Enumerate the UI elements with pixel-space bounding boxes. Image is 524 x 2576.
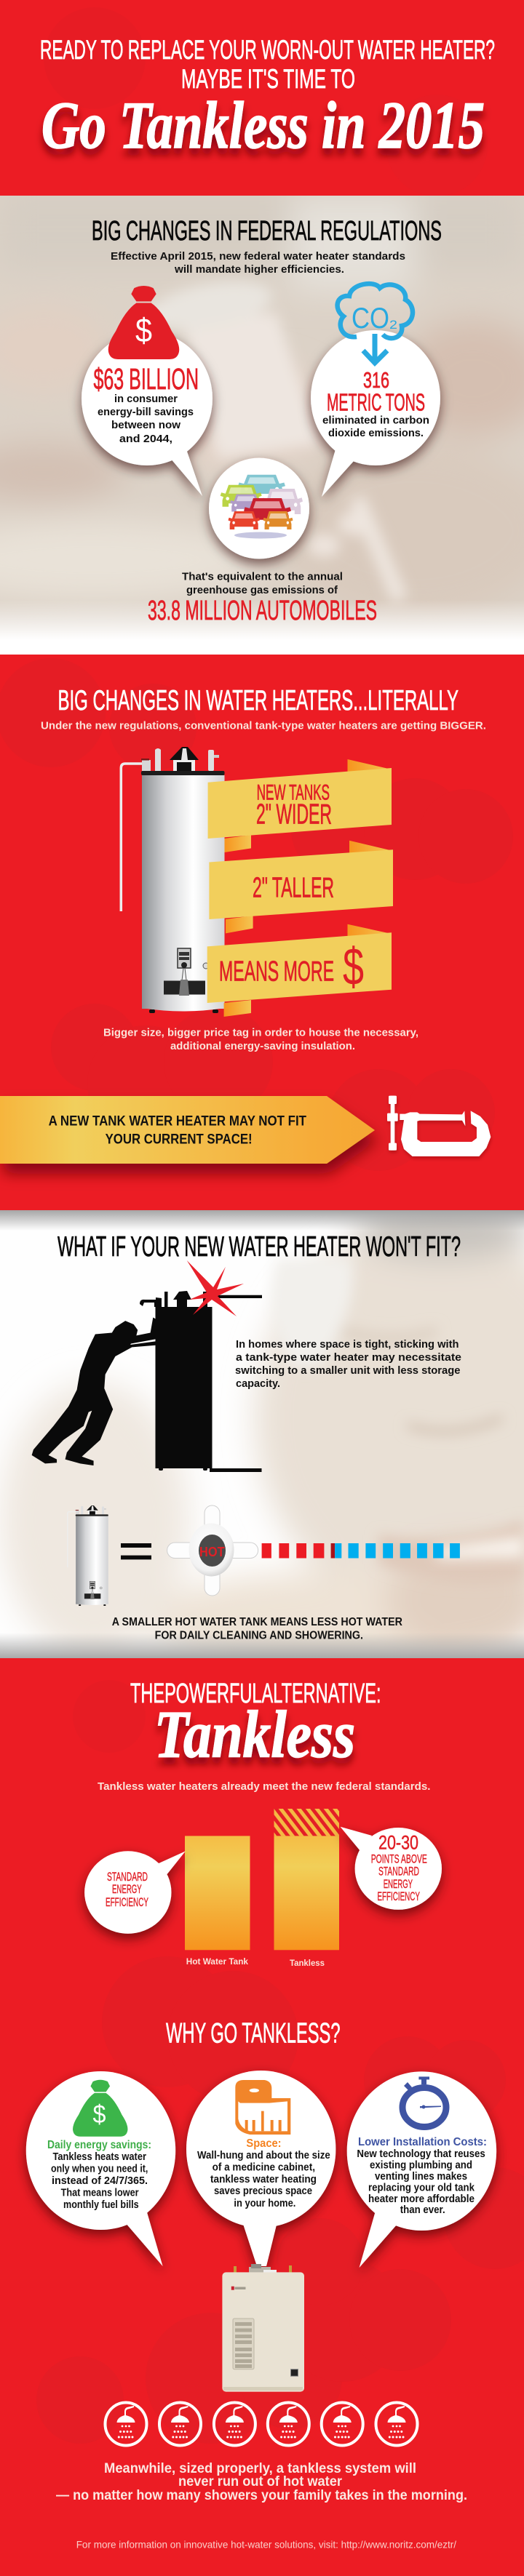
speech bubble bbox=[186, 2071, 336, 2266]
body bbox=[197, 2150, 330, 2209]
header line 2: MAYBE IT'S TIME TO bbox=[181, 64, 355, 94]
description: dioxide emissions. bbox=[328, 427, 424, 439]
ribbon: means more dollars bbox=[207, 924, 392, 1017]
callout: standard energy efficiency: EFFICIENCY bbox=[106, 1895, 148, 1909]
arrow banner: may not fit bbox=[0, 1096, 375, 1164]
intro text: Effective April 2015, new federal water heater standards bbox=[111, 250, 405, 263]
callout: standard energy efficiency: STANDARD bbox=[107, 1870, 148, 1884]
ribbon: means more dollars: MEANS MORE bbox=[219, 956, 334, 988]
callout: $63 billion savings bbox=[82, 286, 213, 496]
icon: CO2 cloud with arrow bbox=[338, 284, 413, 363]
body: monthly fuel bills bbox=[63, 2199, 139, 2211]
heading: the powerful alternative: THEPOWERFULALTERNATIVE: bbox=[130, 1679, 381, 1709]
arrow banner: may not fit: A NEW TANK WATER HEATER MAY NOT FIT bbox=[49, 1113, 306, 1129]
panel: federal regulations photo background bbox=[0, 189, 524, 655]
equivalence text: That's equivalent to the annual bbox=[182, 570, 343, 583]
text: smaller hot water tank bbox=[112, 1616, 402, 1642]
icon: stopwatch bbox=[402, 2076, 446, 2127]
equivalence text bbox=[148, 570, 377, 626]
icon: green money bag bbox=[73, 2080, 127, 2137]
text: meanwhile: Meanwhile, sized properly, a tankless system will bbox=[104, 2461, 416, 2476]
bubble bbox=[209, 458, 309, 559]
title: Lower Installation Costs: bbox=[358, 2136, 487, 2148]
icon: CO2 cloud with arrow: 2 bbox=[389, 318, 397, 332]
big red automobiles number: 33.8 MILLION AUTOMOBILES bbox=[148, 596, 377, 626]
man silhouette bbox=[32, 1317, 156, 1465]
body: tankless water heating bbox=[210, 2174, 317, 2185]
arrow banner: may not fit: YOUR CURRENT SPACE! bbox=[106, 1131, 253, 1147]
text: homes where space is tight: capacity. bbox=[236, 1377, 280, 1390]
callout: 20-30 points above: EFFICIENCY bbox=[377, 1889, 420, 1903]
script title: tankless: Tankless bbox=[154, 1697, 355, 1771]
icons: six showers bbox=[105, 2403, 418, 2445]
illustration: man pushing tank against wall bbox=[32, 1260, 262, 1472]
speech bubble right bbox=[311, 330, 440, 497]
body: only when you need it, bbox=[51, 2164, 148, 2175]
intro text bbox=[111, 250, 405, 276]
header: ready to replace bbox=[40, 35, 495, 162]
subheading text: Under the new regulations, conventional tank-type water heaters are getting BIGGER. bbox=[41, 720, 486, 732]
callout: 316 metric tons: METRIC TONS bbox=[327, 388, 425, 416]
footer link text: For more information on innovative hot-water solutions, visit: http://www.noritz.com/eztr/ bbox=[76, 2538, 456, 2550]
text: homes where space is tight: a tank-type water heater may necessitate bbox=[236, 1351, 461, 1364]
callout: daily energy savings bbox=[26, 2071, 175, 2266]
panel: won't fit photo background bbox=[0, 1200, 524, 1673]
title: Daily energy savings: bbox=[47, 2139, 151, 2151]
text: homes where space is tight bbox=[235, 1338, 461, 1390]
bar: hot water tank bbox=[185, 1836, 250, 1950]
bar: tankless bbox=[274, 1809, 339, 1950]
speech bubble bbox=[347, 2071, 496, 2268]
label: tankless: Tankless bbox=[290, 1958, 325, 1968]
icon: C-clamp bbox=[387, 1096, 491, 1156]
text: homes where space is tight: In homes where space is tight, sticking with bbox=[236, 1338, 458, 1351]
illustration: tankless water heater unit bbox=[222, 2264, 304, 2392]
callout: space bbox=[186, 2071, 336, 2266]
icon: hot water faucet handle: HOT bbox=[199, 1545, 225, 1559]
ribbon: 2 inches taller: 2" TALLER bbox=[253, 873, 334, 904]
ribbon: means more dollars: $ bbox=[343, 938, 364, 996]
ribbon: 2 inches wider: NEW TANKS bbox=[257, 780, 330, 804]
callout: 20-30 points above: ENERGY bbox=[384, 1877, 413, 1891]
body: heater more affordable bbox=[368, 2193, 475, 2205]
body: Tankless heats water bbox=[52, 2151, 146, 2163]
wall lines bbox=[210, 1295, 262, 1472]
ribbon: 2 inches wider: 2" WIDER bbox=[256, 799, 332, 831]
callout: cars bubble bbox=[209, 458, 309, 559]
body: saves precious space bbox=[214, 2185, 312, 2197]
icon: CO2 cloud with arrow: CO bbox=[352, 303, 389, 335]
icon: red impact burst bbox=[187, 1260, 244, 1316]
body: of a medicine cabinet, bbox=[213, 2162, 315, 2174]
ribbon: 2 inches wider bbox=[208, 759, 392, 852]
body: than ever. bbox=[400, 2204, 445, 2216]
text: smaller hot water tank: FOR DAILY CLEANING AND SHOWERING. bbox=[155, 1629, 363, 1642]
body bbox=[51, 2151, 148, 2211]
text: homes where space is tight: switching to a smaller unit with less storage bbox=[235, 1364, 460, 1377]
description: energy-bill savings bbox=[98, 406, 194, 418]
callout: 20-30 points above: POINTS ABOVE bbox=[371, 1852, 427, 1866]
description bbox=[322, 415, 429, 439]
text: smaller hot water tank: A SMALLER HOT WATER TANK MEANS LESS HOT WATER bbox=[112, 1616, 402, 1628]
text: meanwhile: never run out of hot water bbox=[178, 2474, 343, 2489]
black tank silhouette bbox=[140, 1291, 213, 1471]
text: meanwhile bbox=[56, 2461, 467, 2503]
callout: 20-30 points above: 20-30 bbox=[378, 1832, 418, 1854]
text: meanwhile: — no matter how many showers your family takes in the morning. bbox=[56, 2488, 467, 2503]
callout: 20-30 points above bbox=[341, 1827, 442, 1910]
icon: green money bag: $ bbox=[93, 2100, 106, 2129]
text: already meet: Tankless water heaters already meet the new federal standards. bbox=[98, 1780, 431, 1793]
description: in consumer bbox=[114, 393, 178, 405]
body: in your home. bbox=[234, 2198, 295, 2209]
speech bubble bbox=[26, 2071, 175, 2266]
equals sign bbox=[121, 1543, 151, 1559]
icon: hot water faucet handle bbox=[167, 1505, 258, 1596]
illustration: large water heater bbox=[121, 747, 224, 1013]
body: existing plumbing and bbox=[370, 2159, 472, 2171]
amount: $63 BILLION bbox=[93, 362, 199, 396]
description: between now bbox=[111, 419, 180, 431]
speech bubble left bbox=[82, 332, 213, 496]
callout: lower installation costs bbox=[347, 2071, 496, 2268]
icon: red money bag bbox=[108, 286, 179, 359]
illustration: small water heater bbox=[68, 1505, 108, 1606]
body: replacing your old tank bbox=[368, 2182, 475, 2193]
icon: tape measure bbox=[235, 2080, 290, 2135]
hot to cold dashed bar bbox=[262, 1543, 460, 1558]
text: bigger size: additional energy-saving insulation. bbox=[170, 1040, 355, 1052]
icon: traffic of cars bbox=[221, 475, 303, 529]
equivalence text: greenhouse gas emissions of bbox=[186, 584, 338, 596]
text: bigger size: Bigger size, bigger price tag in order to house the necessary, bbox=[103, 1027, 418, 1039]
bar chart: efficiency bbox=[84, 1809, 442, 1968]
ribbon: 2 inches taller bbox=[209, 841, 393, 933]
label: hot water tank: Hot Water Tank bbox=[186, 1956, 248, 1967]
callout: 20-30 points above: STANDARD bbox=[378, 1865, 419, 1879]
title: Space: bbox=[246, 2137, 282, 2150]
body: instead of 24/7/365. bbox=[52, 2175, 148, 2187]
callout: 316 metric tons bbox=[311, 284, 440, 497]
body: New technology that reuses bbox=[357, 2148, 485, 2160]
text: bigger size bbox=[103, 1027, 418, 1052]
icon: red money bag: $ bbox=[135, 311, 152, 349]
callout: standard energy efficiency bbox=[84, 1851, 186, 1934]
body: That means lower bbox=[61, 2188, 139, 2199]
car shadow bbox=[234, 532, 287, 538]
description bbox=[98, 393, 194, 445]
body: Wall-hung and about the size bbox=[197, 2150, 330, 2161]
heading: why go tankless: WHY GO TANKLESS? bbox=[166, 2017, 341, 2049]
body: venting lines makes bbox=[375, 2171, 467, 2183]
amount: 316 bbox=[363, 367, 389, 393]
intro text: will mandate higher efficiencies. bbox=[174, 263, 344, 276]
callout: standard energy efficiency: ENERGY bbox=[112, 1882, 142, 1896]
description: eliminated in carbon bbox=[322, 415, 429, 426]
description: and 2044, bbox=[119, 433, 172, 445]
body bbox=[357, 2148, 485, 2216]
